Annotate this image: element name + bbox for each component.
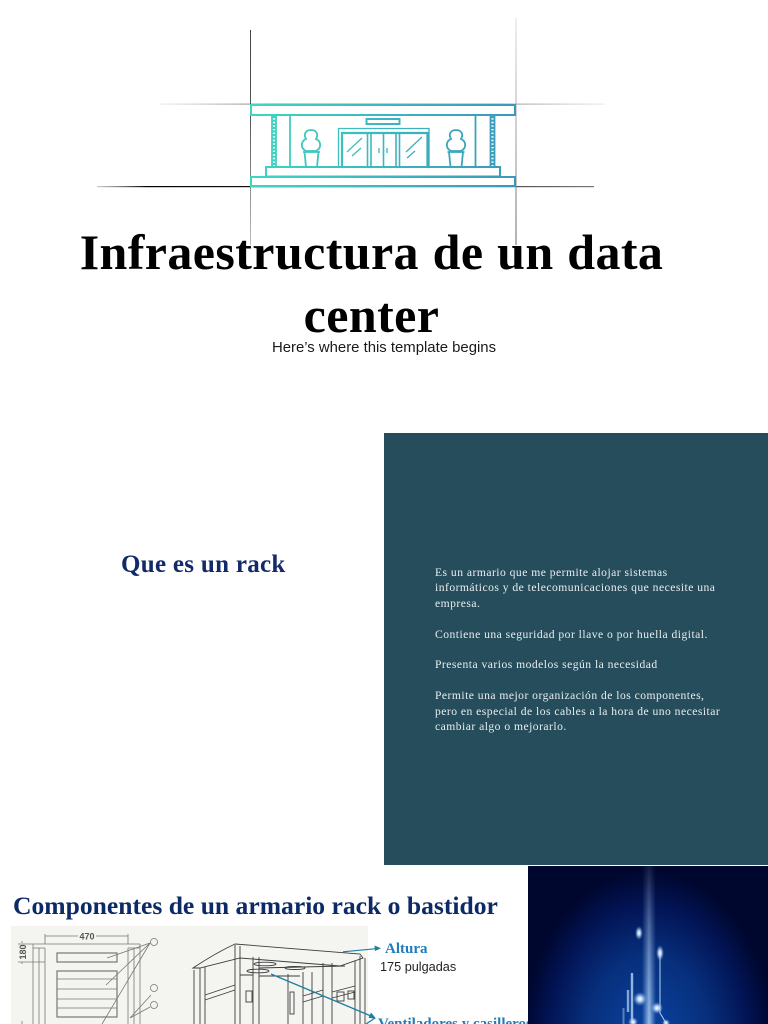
text block: rack description: informáticos y de telecomunicaciones que necesite una xyxy=(435,581,715,594)
title: Infraestructura de un data xyxy=(80,224,663,280)
dimension label: 180: 180 xyxy=(18,944,28,960)
title: center xyxy=(304,286,439,342)
arrow: ventiladores xyxy=(270,973,376,1024)
text block: rack description xyxy=(435,566,720,733)
text block: rack description: Contiene una seguridad por llave o por huella digital. xyxy=(435,628,708,641)
panel: rack description xyxy=(384,433,768,865)
heading: componentes: Componentes de un armario rack o bastidor xyxy=(13,891,498,920)
title xyxy=(80,224,663,342)
text block: rack description: empresa. xyxy=(435,597,480,610)
subtitle: Here’s where this template begins xyxy=(272,340,496,356)
icon: building storefront with guide lines xyxy=(97,18,605,245)
text block: rack description: Es un armario que me permite alojar sistemas xyxy=(435,566,668,579)
text block: rack description: cambiar algo o mejorarlo. xyxy=(435,720,567,733)
text block: rack description: Presenta varios modelos según la necesidad xyxy=(435,658,658,671)
diagram: rack technical drawing xyxy=(11,926,368,1024)
image: blue technology light background xyxy=(528,866,768,1024)
text block: rack description: pero en especial de los cables a la hora de uno necesitar xyxy=(435,705,720,718)
text: 175 pulgadas: 175 pulgadas xyxy=(380,960,456,974)
arrow: altura xyxy=(342,946,381,952)
dimension label: 470: 470 xyxy=(79,932,95,942)
text block: rack description: Permite una mejor organización de los componentes, xyxy=(435,689,704,702)
heading: que es un rack: Que es un rack xyxy=(121,551,286,578)
label: altura: Altura xyxy=(385,941,428,957)
